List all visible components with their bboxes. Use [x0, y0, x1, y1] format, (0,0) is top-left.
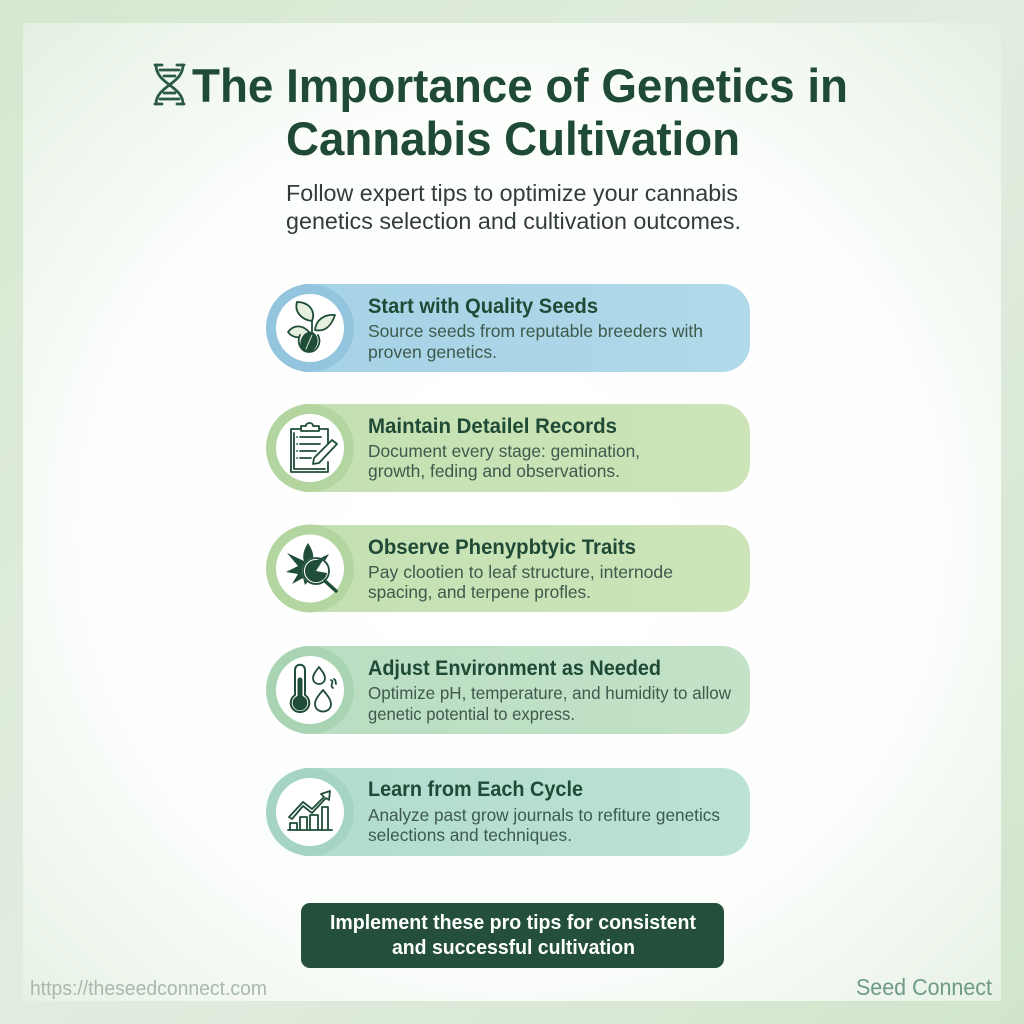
heading: Learn from Each Cycle	[368, 778, 583, 801]
description: genetic potential to express.	[368, 704, 575, 724]
description: growth, feding and observations.	[368, 461, 620, 481]
subtitle: Follow expert tips to optimize your cannabis	[286, 180, 738, 206]
description: Analyze past grow journals to refiture genetics	[368, 805, 720, 825]
description	[368, 683, 731, 724]
footer url: https://theseedconnect.com	[30, 978, 267, 1000]
description: selections and techniques.	[368, 825, 572, 845]
description: Pay clootien to leaf structure, internode	[368, 562, 673, 582]
description: Document every stage: gemination,	[368, 441, 640, 461]
description: spacing, and terpene profles.	[368, 582, 591, 602]
callout: closing message: Implement these pro tips for consistent	[330, 912, 696, 934]
description	[368, 562, 673, 602]
callout: closing message	[301, 903, 724, 968]
heading: Observe Phenypbtyic Traits	[368, 536, 636, 559]
description: Source seeds from reputable breeders with	[368, 321, 703, 341]
icon: sprouting seed	[288, 302, 335, 353]
description: proven genetics.	[368, 342, 497, 362]
icon: thermometer and water drops	[291, 665, 336, 712]
heading: Maintain Detailel Records	[368, 415, 617, 438]
icon: clipboard and pencil	[291, 423, 337, 472]
callout: closing message: and successful cultivation	[392, 937, 635, 959]
title: Cannabis Cultivation	[286, 112, 740, 165]
description	[368, 805, 720, 845]
panel: tip 2 detailed records	[266, 404, 750, 492]
heading: Adjust Environment as Needed	[368, 657, 661, 680]
panel: tip 1 quality seeds	[266, 284, 750, 372]
panel: tip 5 learn from each cycle	[266, 768, 750, 856]
title	[192, 59, 848, 165]
panel: tip 4 adjust environment	[266, 646, 750, 734]
panel: tip 3 phenotypic traits	[266, 524, 750, 612]
footer brand: Seed Connect	[856, 974, 993, 1000]
icon: cannabis leaf under magnifier	[286, 543, 336, 591]
subtitle: genetics selection and cultivation outcomes.	[286, 208, 741, 234]
icon: growth chart	[288, 791, 332, 830]
description: Optimize pH, temperature, and humidity to allow	[368, 683, 731, 703]
subtitle	[286, 180, 741, 234]
description	[368, 441, 640, 481]
description	[368, 321, 703, 362]
title: The Importance of Genetics in	[192, 59, 848, 112]
icon: DNA helix	[155, 65, 184, 104]
heading: Start with Quality Seeds	[368, 295, 598, 318]
